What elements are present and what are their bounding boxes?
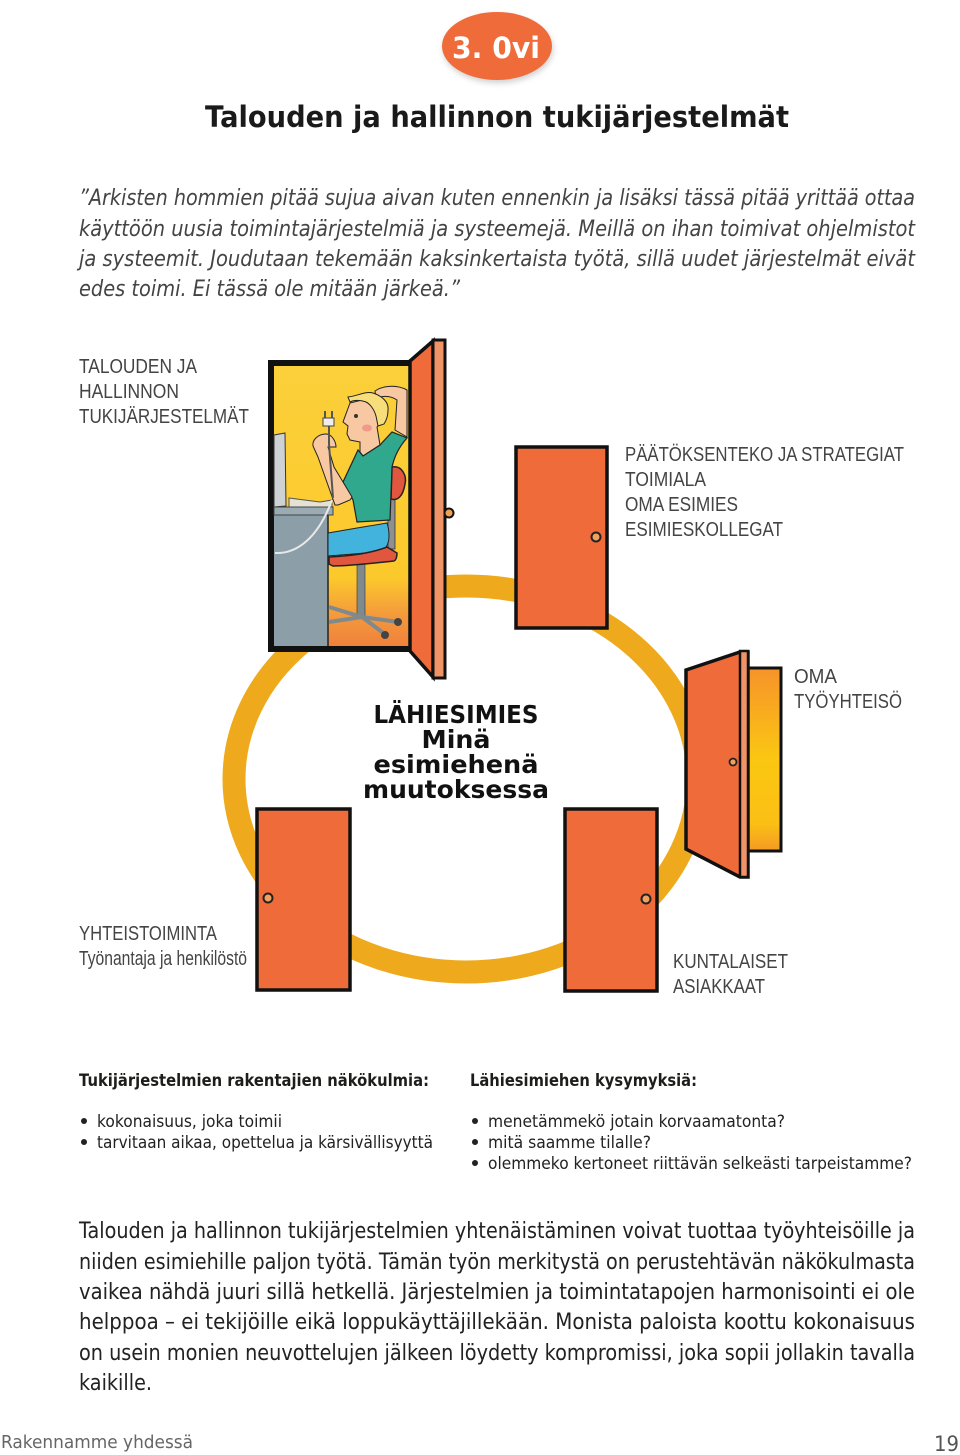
chair [329,467,405,639]
plug and cord [325,411,333,498]
door: bottom right [565,809,657,991]
ring behind doors [234,586,698,972]
door label: kuntalaiset [673,951,788,998]
quote text [76,186,916,302]
quote text: edes toimi. Ei tässä ole mitään järkeä.” [79,277,461,302]
center label: Lähiesimies: Minä [422,725,490,754]
door label: päätöksenteko: ESIMIESKOLLEGAT [625,519,783,541]
door label: päätöksenteko: TOIMIALA [625,469,707,491]
door label: yhteistoiminta: Työnantaja ja henkilöstö [79,948,247,970]
door label: päätöksenteko: OMA ESIMIES [625,494,738,516]
text block: lähiesimiehen kysymyksiä [470,1071,912,1174]
door label: oma työyhteisö [794,666,902,713]
text block: lähiesimiehen kysymyksiä: Lähiesimiehen kysymyksiä: [470,1071,697,1091]
door label: oma työyhteisö: OMA [794,666,838,688]
door label: kuntalaiset: ASIAKKAAT [673,976,765,998]
door: bottom left [257,809,350,990]
door label: talouden ja hallinnon: TUKIJÄRJESTELMÄT [79,406,249,428]
door label: yhteistoiminta: YHTEISTOIMINTA [79,923,218,945]
hair [348,393,388,426]
title: Talouden ja hallinnon tukijärjestelmät [205,100,789,134]
door label: päätöksenteko: PÄÄTÖKSENTEKO JA STRATEGIAT [625,444,904,466]
legs [328,523,389,556]
door: top right [516,447,607,628]
door knob [444,508,454,518]
room background [271,363,413,649]
head and neck [343,398,387,456]
center label: Lähiesimies: LÄHIESIMIES [374,699,538,729]
body paragraph [78,1218,915,1396]
door leaf [410,341,433,677]
door label: yhteistoiminta [79,923,247,970]
raised arm [375,386,407,437]
center label: Lähiesimies [363,699,549,804]
text block: rakentajien näkökulmia: tarvitaan aikaa, opettelua ja kärsivällisyyttä [97,1133,433,1153]
shirt [343,432,407,522]
arm and hand [313,434,352,505]
desk [274,500,333,646]
door label: kuntalaiset: KUNTALAISET [673,951,788,973]
papers on desk [289,498,332,507]
text block: rakentajien näkökulmia: Tukijärjestelmien rakentajien näkökulmia: [79,1071,429,1091]
text block: lähiesimiehen kysymyksiä: olemmeko kertoneet riittävän selkeästi tarpeistamme? [488,1154,912,1174]
illustration: open door with person [271,340,454,678]
footer: publication name: Rakennamme yhdessä [1,1432,193,1453]
text block: lähiesimiehen kysymyksiä: menetämmekö jotain korvaamatonta? [488,1112,785,1132]
door: open right with glow [686,651,781,877]
badge: 3. Ovi [442,12,553,83]
chair seat [329,547,397,566]
text block: lähiesimiehen kysymyksiä: mitä saamme tilalle? [488,1133,651,1153]
center label: Lähiesimies: esimiehenä [374,750,538,779]
text block: rakentajien näkökulmia [79,1071,433,1153]
monitor [274,433,286,507]
body paragraph: kaikille. [79,1370,152,1396]
door label: päätöksenteko [625,444,904,541]
door label: talouden ja hallinnon: TALOUDEN JA [79,356,198,378]
door label: oma työyhteisö: TYÖYHTEISÖ [794,691,902,713]
center label: Lähiesimies: muutoksessa [363,775,549,804]
text block: rakentajien näkökulmia: kokonaisuus, joka toimii [97,1112,282,1132]
badge: 3. Ovi: 3. 0vi [452,31,540,65]
door label: talouden ja hallinnon [79,356,249,428]
door label: talouden ja hallinnon: HALLINNON [79,381,179,403]
